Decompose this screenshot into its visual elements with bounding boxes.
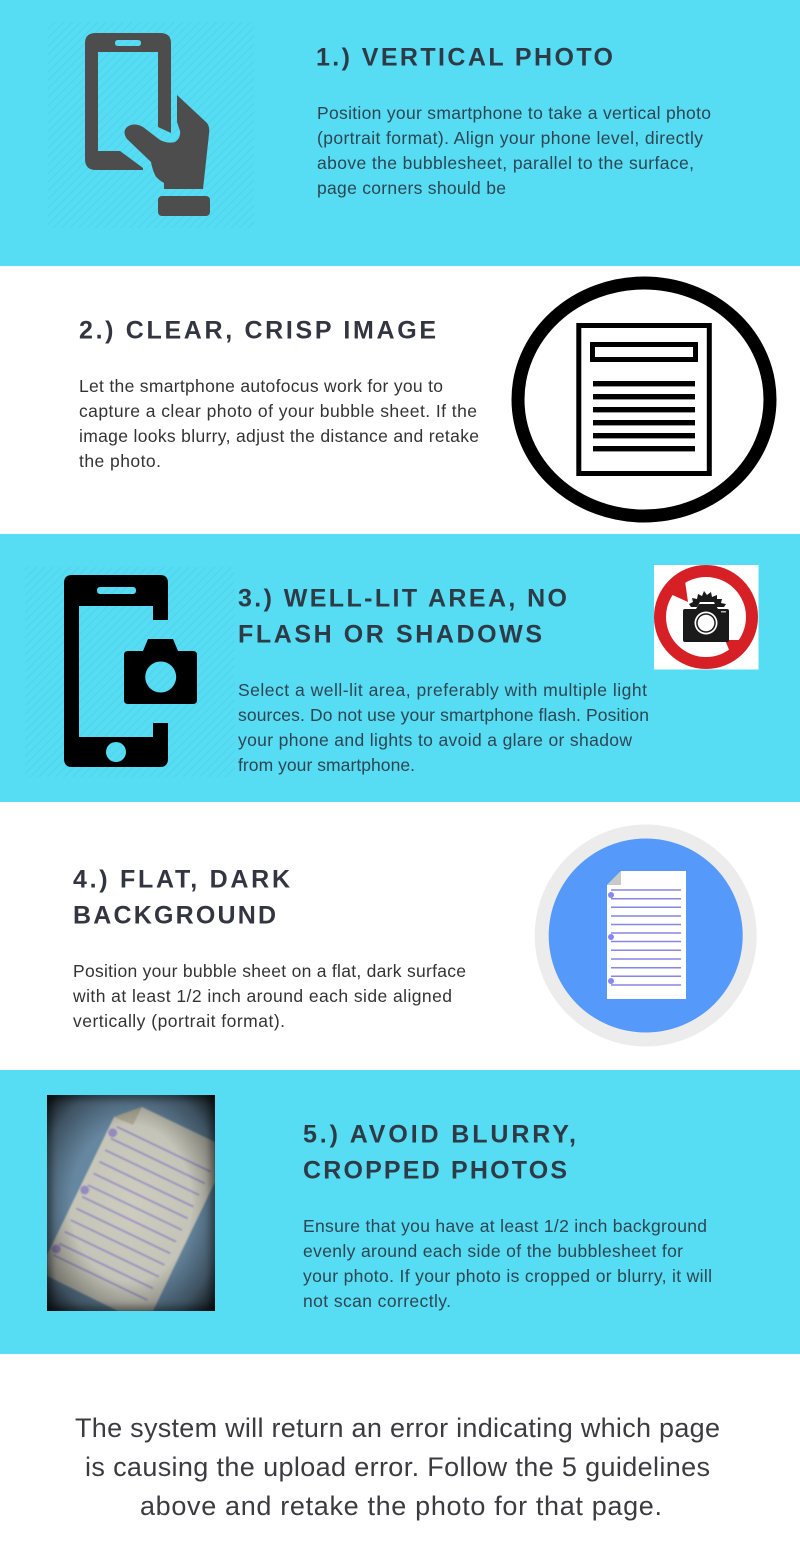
- text: step 2 body: [79, 376, 479, 471]
- text: step 3 body: [238, 680, 649, 775]
- text: step 5 body: not scan correctly.: [303, 1291, 451, 1311]
- heading: step 4: [73, 866, 290, 930]
- text: step 2 body: capture a clear photo of your bubble sheet. If the: [79, 401, 477, 421]
- text: step 5 body: Ensure that you have at least 1/2 inch background: [303, 1216, 707, 1236]
- panel: step 4 flat dark background: [0, 802, 800, 1070]
- text: step 3 body: your phone and lights to avoid a glare or shadow: [238, 730, 632, 750]
- text: step 1 body: [317, 103, 711, 198]
- heading: step 2: 2.) CLEAR, CRISP IMAGE: [79, 316, 436, 344]
- panel: step 5 avoid blurry cropped photos: [0, 1070, 800, 1354]
- panel: step 1 vertical photo: [0, 0, 800, 266]
- panel: step 2 clear crisp image: [0, 266, 800, 534]
- text: step 4 body: vertically (portrait format).: [73, 1011, 285, 1031]
- icon: hand holding phone: [48, 22, 254, 228]
- heading: step 4: BACKGROUND: [73, 902, 276, 930]
- text: step 5 body: evenly around each side of the bubblesheet for: [303, 1241, 683, 1261]
- closing note: is causing the upload error. Follow the 5 guidelines: [85, 1452, 710, 1482]
- text: step 3 body: Select a well-lit area, preferably with multiple light: [238, 680, 647, 700]
- icon: phone with camera: [25, 567, 235, 777]
- text: step 4 body: Position your bubble sheet on a flat, dark surface: [73, 961, 466, 981]
- text: step 2 body: the photo.: [79, 451, 161, 471]
- closing note: The system will return an error indicating which page: [75, 1413, 720, 1443]
- icon: no flash sign: [654, 565, 758, 670]
- icon: document in circle: [518, 283, 770, 516]
- text: step 2 body: Let the smartphone autofocus work for you to: [79, 376, 443, 396]
- text: step 3 body: from your smartphone.: [238, 755, 415, 775]
- heading: step 5: 5.) AVOID BLURRY,: [303, 1120, 576, 1148]
- text: step 1 body: page corners should be: [317, 178, 506, 198]
- image: blurry cropped sheet photo: [47, 1095, 215, 1311]
- heading: step 3: FLASH OR SHADOWS: [238, 620, 542, 648]
- heading: step 4: 4.) FLAT, DARK: [73, 866, 290, 894]
- text: step 1 body: above the bubblesheet, parallel to the surface,: [317, 153, 694, 173]
- heading: step 3: [238, 584, 567, 648]
- heading: step 5: CROPPED PHOTOS: [303, 1156, 567, 1184]
- heading: step 5: [303, 1120, 576, 1184]
- panel: step 3 well-lit area: [0, 534, 800, 802]
- heading: step 3: 3.) WELL-LIT AREA, NO: [238, 584, 567, 612]
- text: step 4 body: with at least 1/2 inch around each side aligned: [72, 986, 452, 1006]
- text: step 4 body: [72, 961, 466, 1031]
- text: step 5 body: your photo. If your photo is cropped or blurry, it will: [303, 1266, 712, 1286]
- text: step 3 body: sources. Do not use your smartphone flash. Position: [238, 705, 649, 725]
- closing note: above and retake the photo for that page.: [140, 1491, 662, 1521]
- text: step 1 body: Position your smartphone to take a vertical photo: [317, 103, 711, 123]
- closing note: [75, 1413, 720, 1521]
- text: step 1 body: (portrait format). Align your phone level, directly: [317, 128, 703, 148]
- text: step 2 body: image looks blurry, adjust the distance and retake: [79, 426, 479, 446]
- heading: step 1: 1.) VERTICAL PHOTO: [316, 44, 613, 72]
- icon: lined sheet in blue circle: [535, 824, 757, 1046]
- text: step 5 body: [303, 1216, 712, 1311]
